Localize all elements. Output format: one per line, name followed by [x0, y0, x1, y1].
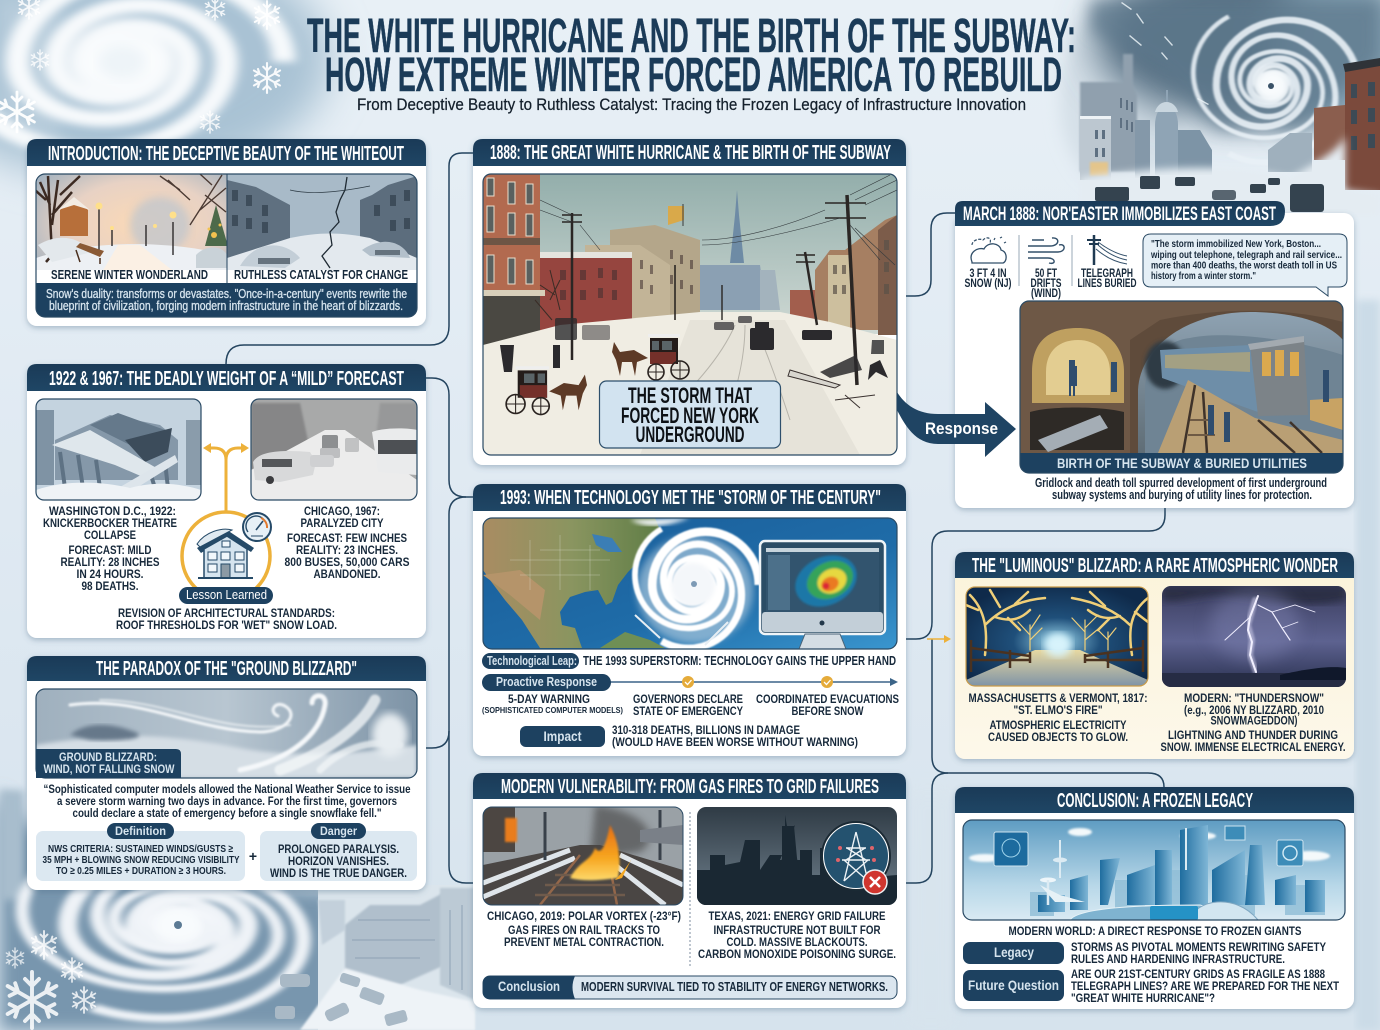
right case text: Chicago: CHICAGO, 1967: [304, 504, 380, 518]
header: introduction [27, 139, 426, 166]
panel: conclusion frozen legacy [955, 787, 1354, 1009]
left case text: Washington D.C.: COLLAPSE [84, 528, 136, 542]
header: 1993 [473, 484, 906, 511]
quote [44, 782, 411, 820]
danger box [260, 823, 417, 881]
left case text: Chicago 2019: GAS FIRES ON RAIL TRACKS TO [508, 923, 660, 937]
image frame [36, 174, 417, 317]
left case text: Washington D.C.: 98 DEATHS. [82, 579, 138, 593]
definition box: NWS CRITERIA: SUSTAINED WINDS/GUSTS ≥ [48, 843, 233, 855]
image: gas fires on rail tracks [483, 805, 683, 905]
image frame [36, 399, 201, 500]
separators [1019, 235, 1072, 286]
image frame [483, 518, 897, 649]
stat: telegraph lines: LINES BURIED [1078, 278, 1136, 290]
lesson text: REVISION OF ARCHITECTURAL STANDARDS: [118, 606, 335, 620]
image: futuristic city [963, 820, 1345, 920]
timeline: proactive response [482, 674, 898, 691]
left case text: St. Elmo's fire: CAUSED OBJECTS TO GLOW. [988, 730, 1128, 744]
timeline labels: GOVERNORS DECLARE [633, 692, 743, 706]
panel: modern vulnerability [473, 773, 906, 1008]
left case text: Washington D.C.: REALITY: 28 INCHES [60, 555, 160, 569]
left case text: Washington D.C.: KNICKERBOCKER THEATRE [43, 516, 177, 530]
image frame [36, 689, 417, 778]
image: Chicago 1967 street [251, 399, 417, 500]
legacy row: RULES AND HARDENING INFRASTRUCTURE. [1071, 952, 1285, 966]
header: conclusion [955, 787, 1354, 813]
background swirl: bottom left [0, 790, 355, 1030]
image: thundersnow lightning [1162, 586, 1346, 687]
caption: MODERN WORLD: A DIRECT RESPONSE TO FROZEN GIANTS [1008, 924, 1302, 938]
header: 1993: 1993: WHEN TECHNOLOGY MET THE "STORM OF THE CENTURY" [500, 487, 881, 509]
header: ground blizzard [27, 656, 426, 681]
legacy row [963, 940, 1326, 966]
background: top-right dark storm and city [1060, 0, 1380, 215]
label: ground blizzard [36, 749, 181, 778]
stat: wind drifts [1028, 238, 1064, 300]
future question row: ARE OUR 21ST-CENTURY GRIDS AS FRAGILE AS 1888 [1071, 967, 1325, 981]
divider [689, 812, 691, 966]
panel: 1993 storm of the century [473, 484, 906, 756]
image frame [483, 174, 897, 455]
labels and description: RUTHLESS CATALYST FOR CHANGE [234, 267, 408, 282]
definition box: 35 MPH + BLOWING SNOW REDUCING VISIBILITY [42, 854, 240, 866]
right case text: thundersnow: LIGHTNING AND THUNDER DURING [1168, 728, 1338, 742]
image: collapsed Knickerbocker Theatre [36, 399, 201, 500]
panel: 1922 and 1967 forecasts [27, 364, 426, 638]
impact row [520, 723, 858, 749]
conclusion bar [483, 976, 897, 999]
labels and description: Snow's duality: transforms or devastates. "Once-in-a-century" events rewrite the [46, 287, 407, 301]
legacy row: Legacy [994, 944, 1034, 960]
technological leap row: Technological Leap: [487, 654, 577, 668]
speech bubble quote: history from a winter storm." [1151, 270, 1256, 282]
right case text: Chicago: 800 BUSES, 50,000 CARS [284, 555, 410, 569]
description [1035, 476, 1327, 502]
danger box: HORIZON VANISHES. [288, 854, 389, 868]
background swirl: top left [0, 0, 330, 180]
timeline: proactive response: Proactive Response [496, 674, 597, 689]
right case text: Chicago: FORECAST: FEW INCHES [287, 531, 407, 545]
header: ground blizzard: THE PARADOX OF THE "GROUND BLIZZARD" [96, 658, 357, 680]
left case text: St. Elmo's fire: MASSACHUSETTS & VERMONT, 1817: [968, 691, 1148, 705]
image frame [251, 399, 417, 500]
plus sign: + [249, 848, 257, 864]
legacy row: STORMS AS PIVOTAL MOMENTS REWRITING SAFETY [1071, 940, 1326, 954]
pill: lesson learned: Lesson Learned [186, 587, 267, 602]
left case text: Washington D.C.: FORECAST: MILD [68, 543, 152, 557]
panel: ground blizzard [27, 656, 426, 890]
panel: introduction [27, 139, 426, 326]
header: 1888: 1888: THE GREAT WHITE HURRICANE & THE BIRTH OF THE SUBWAY [490, 142, 891, 164]
danger box: Danger [320, 824, 357, 838]
conclusion bar: Conclusion [498, 978, 560, 994]
sign: the storm that forced new york underground: UNDERGROUND [636, 422, 744, 447]
subtitle: From Deceptive Beauty to Ruthless Catalyst: Tracing the Frozen Legacy of Infrastructure Innovation [357, 96, 1026, 114]
left case text: Chicago 2019: CHICAGO, 2019: POLAR VORTEX (-23°F) [487, 909, 681, 923]
speech bubble quote: "The storm immobilized New York, Boston... [1151, 238, 1321, 250]
right case text: Chicago: REALITY: 23 INCHES. [296, 543, 398, 557]
panel: March 1888 nor'easter [955, 201, 1354, 508]
image frame [963, 820, 1345, 920]
image: serene winter wonderland and ruthless catalyst [35, 174, 420, 317]
header: modern vulnerability [473, 773, 906, 799]
left case text: Chicago 2019: PREVENT METAL CONTRACTION. [504, 935, 664, 949]
stat: snow: SNOW (NJ) [964, 278, 1012, 290]
quote: a severe storm warning two days in advance. For the first time, governors [57, 794, 397, 808]
right case text: Chicago: PARALYZED CITY [300, 516, 384, 530]
background: right side wash [906, 300, 1380, 1030]
stat: telegraph lines [1078, 235, 1136, 290]
impact row: Impact [544, 728, 582, 744]
arrow: response: Response [925, 419, 998, 438]
right case text: Texas 2021: CARBON MONOXIDE POISONING SURGE. [698, 947, 896, 961]
image: 1888 New York street in snow [483, 174, 897, 455]
label: ground blizzard: GROUND BLIZZARD: [59, 750, 157, 764]
image: ground blizzard [36, 689, 417, 778]
panel: 1888 great white hurricane [473, 139, 906, 465]
arrow: response [897, 392, 1016, 457]
timeline labels: 5-DAY WARNING [508, 692, 590, 706]
right case text: Texas 2021: COLD. MASSIVE BLACKOUTS. [726, 935, 868, 949]
header: 1922 and 1967 [27, 364, 426, 391]
danger box: WIND IS THE TRUE DANGER. [270, 866, 407, 880]
timeline labels: BEFORE SNOW [792, 704, 864, 718]
labels and description: SERENE WINTER WONDERLAND [51, 267, 208, 282]
background: snowy town bottom centre [275, 885, 475, 1030]
technological leap row: THE 1993 SUPERSTORM: TECHNOLOGY GAINS THE UPPER HAND [583, 654, 896, 668]
header: 1888 [473, 139, 906, 166]
timeline labels [482, 692, 899, 718]
definition box: Definition [115, 824, 166, 838]
header: March 1888 [955, 201, 1285, 226]
arrow: orange pointer to luminous panel [927, 635, 951, 643]
quote: could declare a state of emergency before a single snowflake fell." [72, 806, 382, 820]
lesson text: ROOF THRESHOLDS FOR 'WET" SNOW LOAD. [116, 618, 337, 632]
left case text: Chicago 2019 [487, 909, 681, 949]
image frame [1020, 301, 1343, 473]
future question row [963, 967, 1340, 1005]
timeline labels: STATE OF EMERGENCY [633, 704, 743, 718]
definition box: TO ≥ 0.25 MILES + DURATION ≥ 3 HOURS. [56, 865, 226, 877]
image: subway tunnel and buried utilities [1020, 301, 1343, 473]
impact row: 310-318 DEATHS, BILLIONS IN DAMAGE [612, 723, 800, 737]
header: modern vulnerability: MODERN VULNERABILITY: FROM GAS FIRES TO GRID FAILURES [501, 776, 879, 798]
right case text: Texas 2021 [698, 909, 896, 961]
labels and description: blueprint of civilization, forging modern infrastructure in the heart of blizzards. [49, 299, 403, 313]
right case text: thundersnow: SNOWMAGEDDON) [1210, 714, 1298, 728]
technological leap row [482, 653, 896, 669]
right case text: thundersnow [1160, 691, 1346, 754]
image: St. Elmo's fire trees [966, 587, 1148, 686]
right case text: thundersnow: MODERN: "THUNDERSNOW" [1184, 691, 1324, 705]
panel: luminous blizzard [955, 552, 1354, 759]
right case text: Chicago: ABANDONED. [314, 567, 380, 581]
future question row: "GREAT WHITE HURRICANE"? [1071, 991, 1215, 1005]
danger box: PROLONGED PARALYSIS. [278, 842, 399, 856]
left case text: Washington D.C.: WASHINGTON D.C., 1922: [49, 504, 176, 518]
title [307, 10, 1076, 102]
labels and description [46, 267, 408, 313]
sign: the storm that forced new york underground: THE STORM THAT [628, 383, 752, 408]
definition box [36, 823, 245, 881]
image caption: BIRTH OF THE SUBWAY & BURIED UTILITIES [1057, 456, 1307, 471]
left case text: Washington D.C. [43, 504, 177, 593]
image: dark skyline [697, 807, 897, 905]
lesson text [116, 606, 337, 632]
stat: snow: 3 FT 4 IN [970, 268, 1006, 280]
future question row: Future Question [968, 977, 1059, 993]
impact row: (WOULD HAVE BEEN WORSE WITHOUT WARNING) [612, 735, 858, 749]
left case text: Washington D.C.: IN 24 HOURS. [76, 567, 144, 581]
header: introduction: INTRODUCTION: THE DECEPTIVE BEAUTY OF THE WHITEOUT [48, 143, 404, 165]
connector lines between panels [226, 153, 1165, 883]
right case text: Texas 2021: TEXAS, 2021: ENERGY GRID FAILURE [708, 909, 886, 923]
stat: telegraph lines: TELEGRAPH [1081, 268, 1133, 280]
stat: wind drifts: 50 FT [1035, 268, 1057, 280]
sign: the storm that forced new york underground [600, 381, 780, 448]
quote: “Sophisticated computer models allowed the National Weather Service to issue [44, 782, 411, 796]
icon: lesson learned house with orange arrows [182, 443, 271, 600]
sign: the storm that forced new york underground: FORCED NEW YORK [621, 403, 759, 428]
left case text: St. Elmo's fire: "ST. ELMO'S FIRE" [1014, 703, 1102, 717]
speech bubble quote [1143, 234, 1347, 296]
timeline labels: COORDINATED EVACUATIONS [756, 692, 899, 706]
right case text: thundersnow: (e.g., 2006 NY BLIZZARD, 2010 [1184, 703, 1324, 717]
stat: wind drifts: DRIFTS [1030, 278, 1062, 290]
label: ground blizzard: WIND, NOT FALLING SNOW [44, 762, 175, 776]
stat: wind drifts: (WIND) [1031, 288, 1061, 300]
left case text: St. Elmo's fire: ATMOSPHERIC ELECTRICITY [990, 718, 1126, 732]
timeline labels: (SOPHISTICATED COMPUTER MODELS) [482, 705, 623, 715]
right case text: Chicago [284, 504, 410, 581]
conclusion bar: MODERN SURVIVAL TIED TO STABILITY OF ENERGY NETWORKS. [581, 980, 888, 994]
image frame [966, 587, 1148, 686]
right case text: Texas 2021: INFRASTRUCTURE NOT BUILT FOR [714, 923, 881, 937]
left case text: St. Elmo's fire [968, 691, 1148, 744]
image frame [483, 807, 683, 905]
stat: snow [964, 237, 1012, 290]
image: satellite map with hurricane and monitor [484, 518, 896, 648]
header: 1922 and 1967: 1922 & 1967: THE DEADLY WEIGHT OF A “MILD” FORECAST [49, 368, 404, 390]
